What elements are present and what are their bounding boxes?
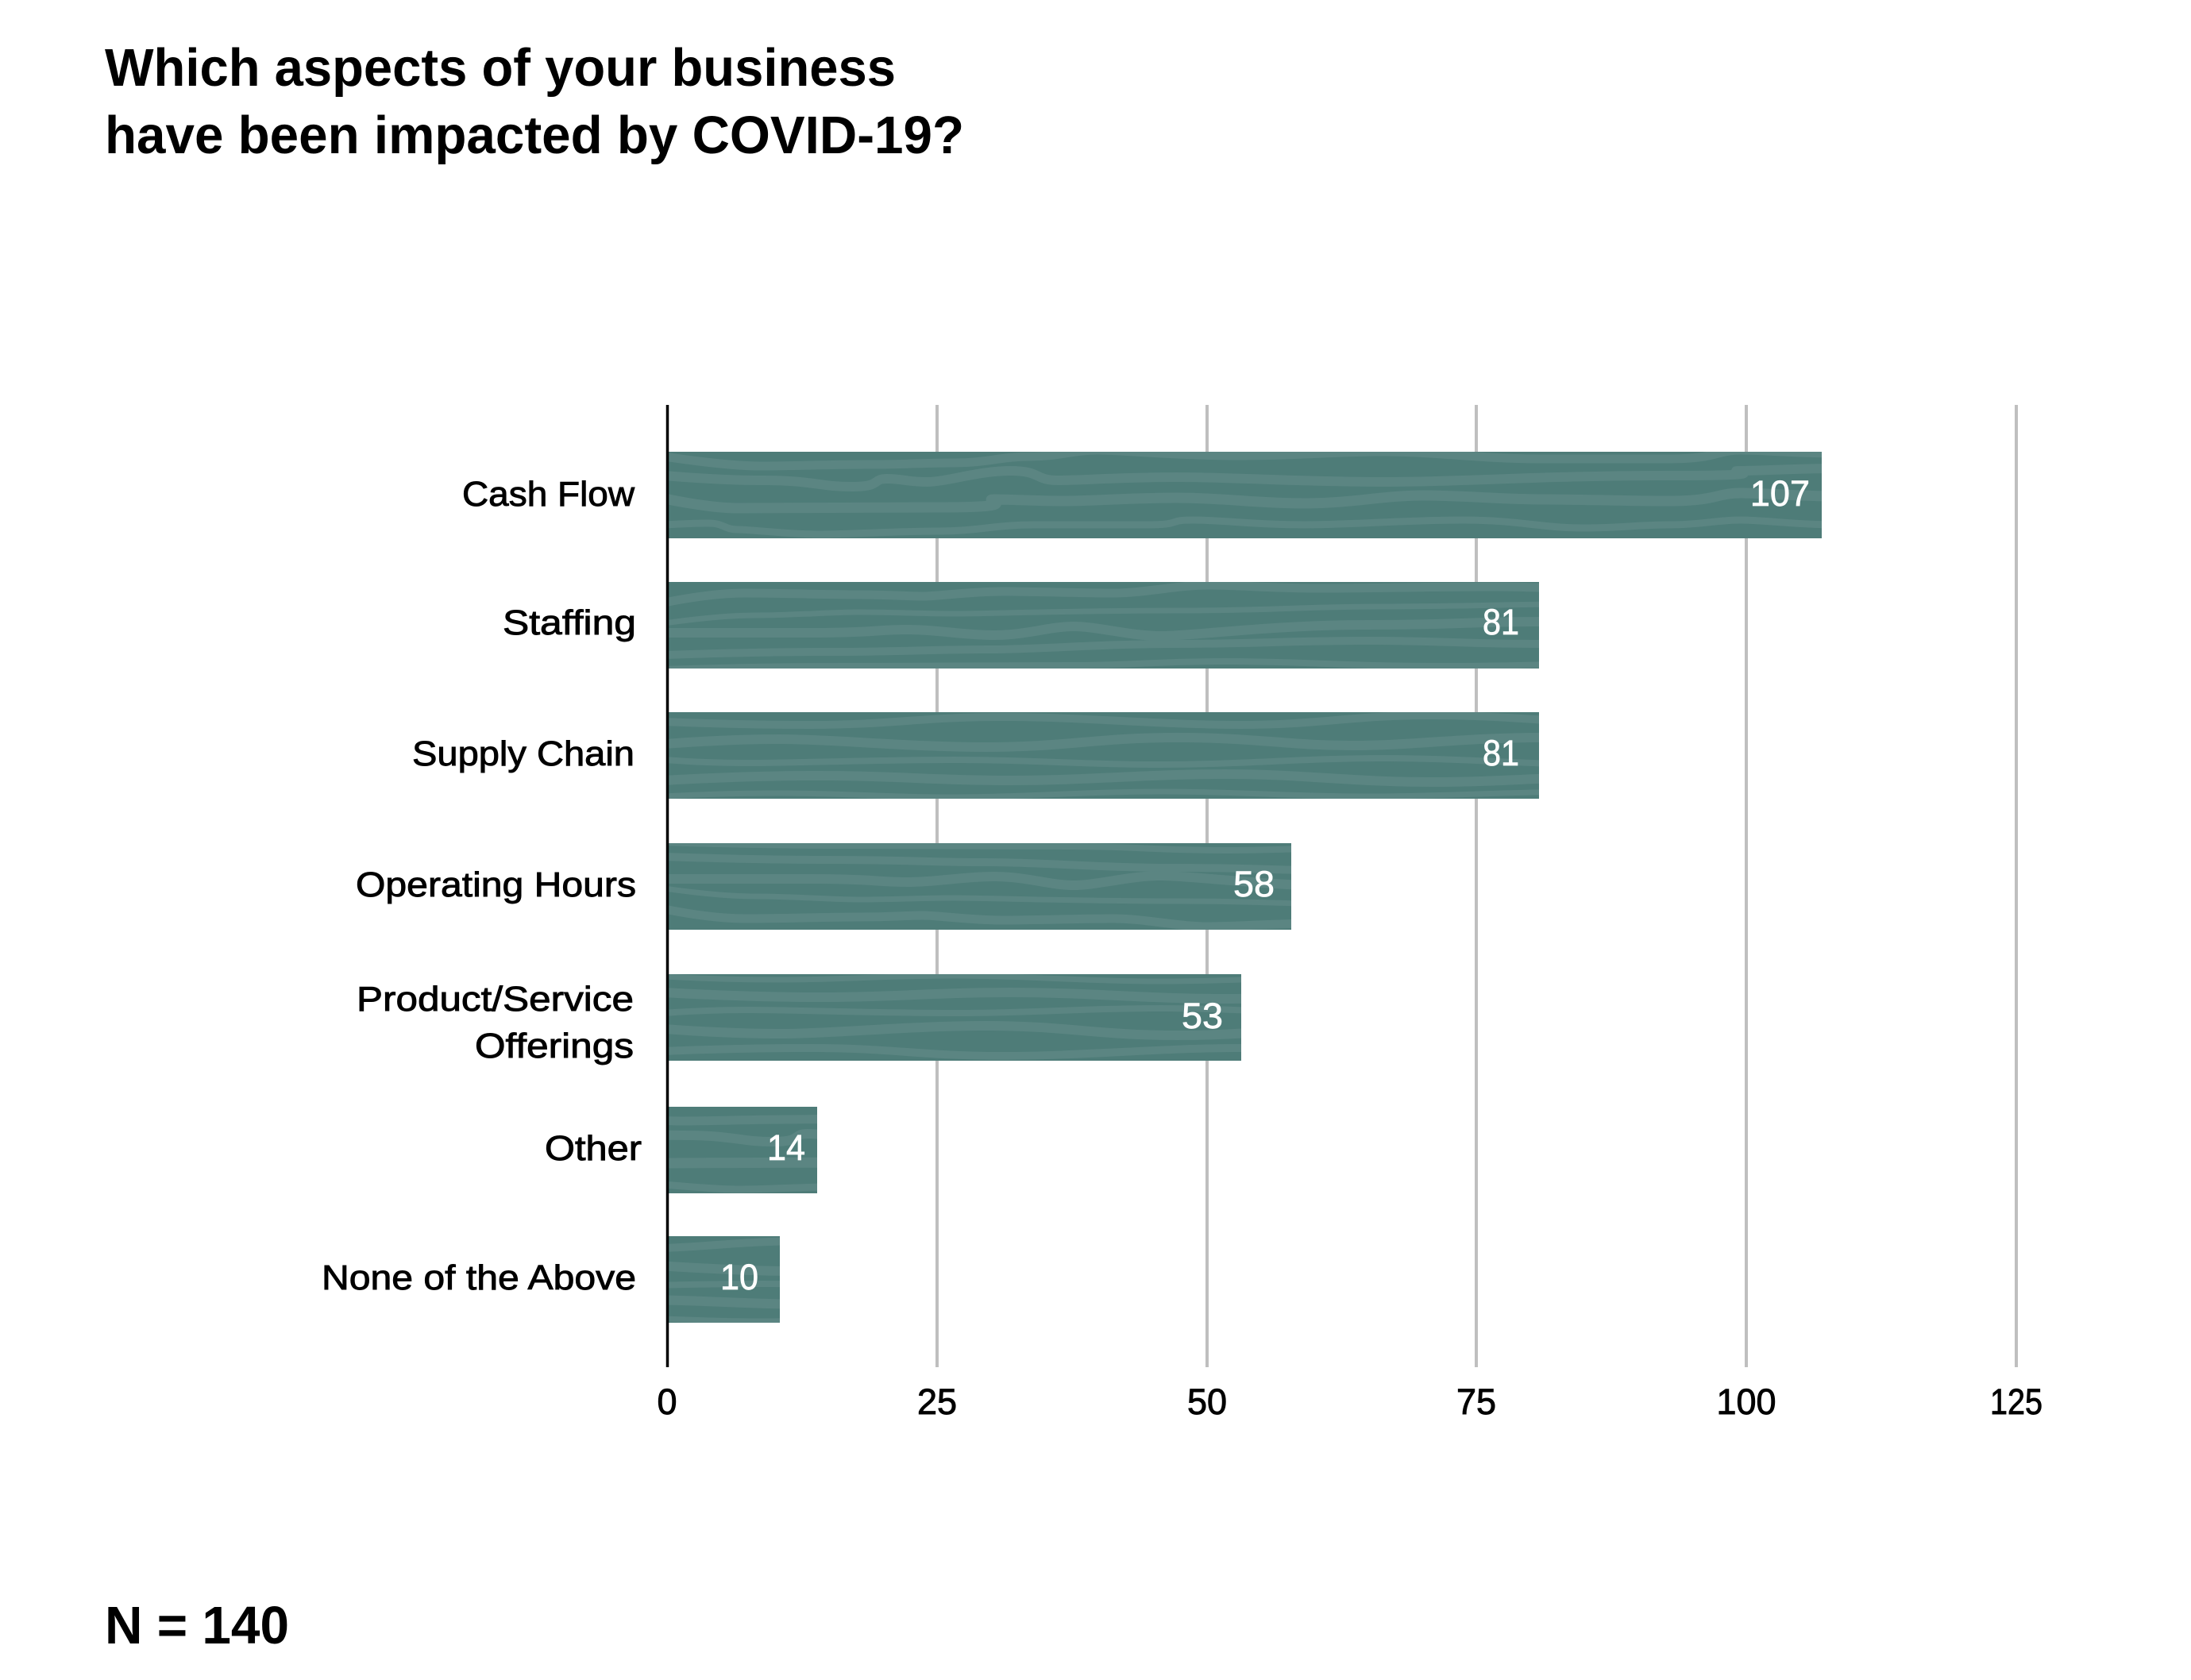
axis tick labels: 50	[1187, 1381, 1227, 1422]
category labels: Product/Service	[357, 980, 634, 1019]
axis tick labels: 0	[657, 1381, 677, 1422]
bar: Other 14	[669, 1107, 817, 1193]
value labels: 107	[1750, 473, 1810, 514]
title: Which aspects of your business	[105, 38, 896, 98]
category labels: Cash Flow	[462, 475, 635, 514]
value labels: 53	[1182, 996, 1223, 1036]
vertical axis	[666, 405, 669, 1367]
bar: Product/Service Offerings 53	[669, 974, 1241, 1061]
category labels: Other	[545, 1129, 642, 1168]
value labels: 58	[1233, 864, 1275, 904]
value labels: 10	[720, 1257, 758, 1297]
axis tick labels: 125	[1990, 1381, 2042, 1422]
grid lines	[937, 405, 2016, 1367]
axis tick labels: 100	[1716, 1381, 1776, 1422]
sample size note: N = 140	[105, 1596, 289, 1655]
axis tick labels	[657, 1381, 2042, 1422]
bar: Supply Chain 81	[669, 712, 1539, 799]
bar: Cash Flow 107	[665, 450, 1836, 538]
category labels: Offerings	[475, 1027, 634, 1065]
category labels: Operating Hours	[356, 865, 636, 904]
category labels	[322, 475, 642, 1297]
category labels: Supply Chain	[412, 734, 635, 773]
axis tick labels: 75	[1456, 1381, 1496, 1422]
value labels: 81	[1483, 733, 1519, 773]
axis tick labels: 25	[917, 1381, 957, 1422]
title: have been impacted by COVID-19?	[105, 106, 964, 165]
bar: Operating Hours 58	[669, 843, 1291, 930]
title	[105, 38, 964, 165]
bar: Staffing 81	[669, 582, 1539, 669]
bar: None of the Above 10	[669, 1236, 780, 1323]
value labels: 81	[1483, 602, 1519, 642]
category labels: None of the Above	[322, 1258, 636, 1297]
value labels	[720, 473, 1810, 1297]
bar chart	[322, 405, 2042, 1422]
value labels: 14	[767, 1127, 805, 1168]
category labels: Staffing	[503, 603, 636, 642]
